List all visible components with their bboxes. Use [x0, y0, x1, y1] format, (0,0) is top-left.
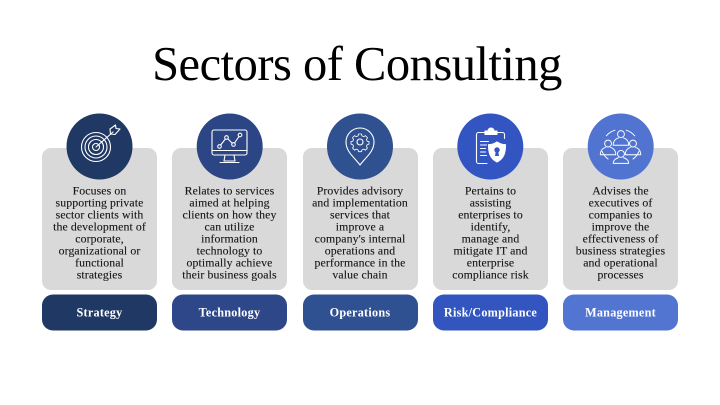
card: strategy [42, 148, 157, 290]
description: risk/compliance: enterprises to [458, 208, 523, 222]
description: strategy: supporting private [56, 196, 143, 210]
description: management: business strategies [576, 244, 665, 258]
panel: risk/compliance [433, 114, 548, 330]
description: operations: Provides advisory [317, 184, 403, 198]
description: technology [182, 184, 277, 282]
description: risk/compliance: assisting [470, 196, 511, 210]
description: operations: performance in the [315, 256, 405, 270]
description: management: improve the [592, 220, 649, 234]
description: technology: information [201, 232, 258, 246]
description: management: companies to [589, 208, 652, 222]
description: risk/compliance: mitigate IT and [453, 244, 528, 258]
icon: clipboard shield [457, 114, 523, 180]
description: technology: aimed at helping [189, 196, 270, 210]
description: strategy: sector clients with [56, 208, 143, 222]
description: technology: optimally achieve [187, 256, 272, 270]
description: operations: and implementation [312, 196, 408, 210]
description: risk/compliance: Pertains to [465, 184, 516, 198]
icon: gear location pin [327, 114, 393, 180]
label: management: Management [585, 306, 656, 320]
description: risk/compliance: enterprise [467, 256, 514, 270]
description: management: Advises the [592, 184, 649, 198]
description: management [576, 184, 665, 282]
icon: target [66, 114, 132, 180]
description: strategy: Focuses on [73, 184, 126, 198]
description: risk/compliance: manage and [462, 232, 519, 246]
panel: technology [172, 114, 287, 330]
description: technology: Relates to services [185, 184, 275, 198]
panel: strategy [42, 114, 157, 330]
label: strategy: Strategy [76, 306, 122, 320]
label: risk/compliance [433, 294, 548, 330]
description: technology: clients on how they [183, 208, 276, 222]
description: management: processes [597, 268, 644, 282]
description: strategy: the development of [53, 220, 146, 234]
description: technology: technology to [197, 244, 262, 258]
description: management: and operational [583, 256, 658, 270]
description: operations: company's internal [315, 232, 406, 246]
icon: monitor chart [197, 114, 263, 180]
description: operations [312, 184, 408, 282]
label: risk/compliance: Risk/Compliance [444, 306, 537, 320]
panel: operations [303, 114, 418, 330]
description: management: effectiveness of [583, 232, 658, 246]
icon: team circle [588, 114, 654, 180]
label: operations: Operations [330, 306, 390, 320]
card: operations [303, 148, 418, 290]
label: operations [303, 294, 418, 330]
description: operations: services that [330, 208, 391, 222]
description: operations: value chain [332, 268, 388, 282]
description: strategy: strategies [77, 268, 123, 282]
description: strategy: organizational or [59, 244, 140, 258]
card: technology [172, 148, 287, 290]
panel: management [563, 114, 678, 330]
description: management: executives of [589, 196, 652, 210]
description: strategy [53, 184, 146, 282]
description: strategy: corporate, [75, 232, 124, 246]
description: technology: can utilize [205, 220, 254, 234]
card: management [563, 148, 678, 290]
title: Sectors of Consulting [152, 38, 562, 91]
label: technology [172, 294, 287, 330]
description: risk/compliance: compliance risk [452, 268, 529, 282]
description: operations: operations and [325, 244, 395, 258]
description: operations: improve a [336, 220, 385, 234]
label: technology: Technology [199, 306, 260, 320]
description: risk/compliance [452, 184, 529, 282]
description: risk/compliance: identify, [471, 220, 510, 234]
description: technology: their business goals [182, 268, 277, 282]
card: risk/compliance [433, 148, 548, 290]
description: strategy: functional [75, 256, 125, 270]
label: strategy [42, 294, 157, 330]
label: management [563, 294, 678, 330]
